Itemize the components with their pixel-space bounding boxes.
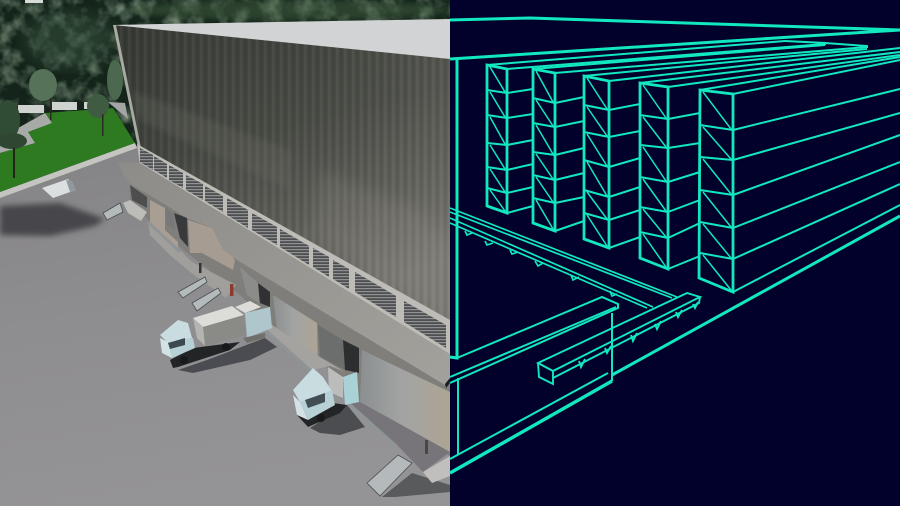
- canopy over loading docks: [118, 162, 450, 388]
- wireframe rack 1: [487, 41, 825, 213]
- ground: asphalt yard: [0, 145, 450, 506]
- loading platform and railing: [123, 200, 450, 483]
- wireframe rack 4: [640, 52, 900, 269]
- panel: warehouse photo: [0, 0, 450, 506]
- wireframe dock canopy: [450, 297, 618, 459]
- wireframe conveyor rail: [450, 208, 677, 308]
- building facade: [113, 25, 450, 325]
- staircases: [103, 203, 412, 496]
- wireframe building outline: [450, 18, 900, 473]
- wireframe raised conveyor beam: [538, 293, 700, 384]
- window band: [137, 144, 450, 356]
- panel: wireframe background: [450, 0, 900, 506]
- truck one: [160, 301, 272, 368]
- background trees and white blocks: [0, 60, 123, 178]
- wireframe rack 2: [533, 41, 867, 231]
- trees behind the warehouse: [0, 0, 450, 150]
- ground shadows: [0, 203, 450, 497]
- lawn: [0, 102, 137, 198]
- wireframe warehouse drawing: [450, 18, 900, 473]
- workers: [199, 263, 428, 454]
- truck two: [293, 367, 359, 427]
- roof: [113, 19, 450, 59]
- lower wall with dock doors: [130, 185, 450, 456]
- wireframe rack 5: [699, 57, 900, 292]
- delivery van: [42, 179, 76, 198]
- wireframe rack 3: [584, 48, 900, 248]
